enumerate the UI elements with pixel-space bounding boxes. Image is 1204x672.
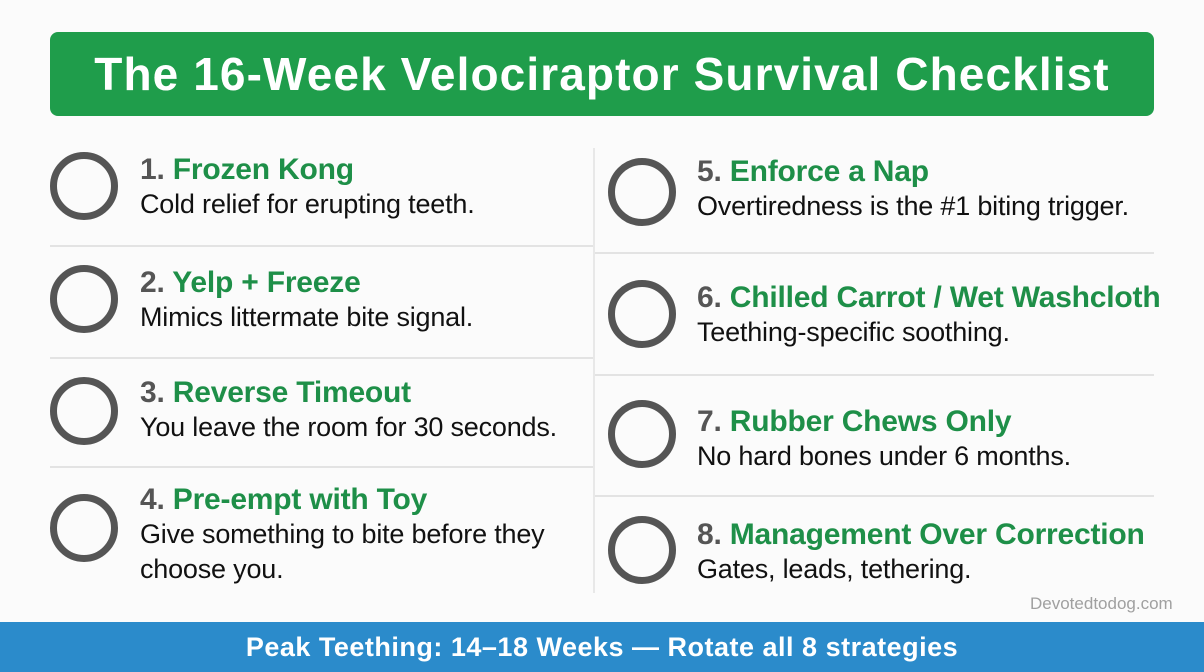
item 7 <box>608 400 1071 471</box>
text 7: No hard bones under 6 months. <box>697 441 1071 471</box>
title <box>50 32 1154 116</box>
text 8: Gates, leads, tethering. <box>697 554 971 584</box>
text 6: 6. Chilled Carrot / Wet Washcloth <box>697 281 1160 314</box>
text 1: 1. Frozen Kong <box>140 153 354 186</box>
item 3 <box>50 376 557 445</box>
text 6 <box>697 281 1160 347</box>
checkbox 6 <box>608 280 676 348</box>
text 4: Give something to bite before they <box>140 519 544 549</box>
item 1 <box>50 152 474 220</box>
text 3: 3. Reverse Timeout <box>140 376 411 409</box>
brand: Devotedtodog.com <box>1030 594 1173 613</box>
text 3: You leave the room for 30 seconds. <box>140 412 557 442</box>
text 1 <box>140 153 474 219</box>
checkbox 8 <box>608 516 676 584</box>
item 4 <box>50 483 544 584</box>
text 8: 8. Management Over Correction <box>697 518 1145 551</box>
title: The 16-Week Velociraptor Survival Checklist <box>94 48 1110 100</box>
text 4: choose you. <box>140 554 283 584</box>
item 2 <box>50 265 473 333</box>
item 5 <box>608 155 1129 226</box>
item 8 <box>608 516 1145 584</box>
footer banner: Peak Teething: 14–18 Weeks — Rotate all 8 strategies <box>246 632 958 662</box>
text 5: Overtiredness is the #1 biting trigger. <box>697 191 1129 221</box>
text 1: Cold relief for erupting teeth. <box>140 189 474 219</box>
text 2 <box>140 266 473 332</box>
text 4: 4. Pre-empt with Toy <box>140 483 427 516</box>
checkbox 2 <box>50 265 118 333</box>
text 5 <box>697 155 1129 221</box>
text 5: 5. Enforce a Nap <box>697 155 929 188</box>
checkbox 7 <box>608 400 676 468</box>
text 6: Teething-specific soothing. <box>697 317 1010 347</box>
checkbox 5 <box>608 158 676 226</box>
checkbox 1 <box>50 152 118 220</box>
text 3 <box>140 376 557 442</box>
text 7: 7. Rubber Chews Only <box>697 405 1011 438</box>
text 7 <box>697 405 1071 471</box>
text 2: Mimics littermate bite signal. <box>140 302 473 332</box>
footer banner <box>0 622 1204 672</box>
item 6 <box>608 280 1160 348</box>
text 8 <box>697 518 1145 584</box>
checkbox 3 <box>50 377 118 445</box>
text 4 <box>140 483 544 584</box>
text 2: 2. Yelp + Freeze <box>140 266 361 299</box>
checkbox 4 <box>50 494 118 562</box>
